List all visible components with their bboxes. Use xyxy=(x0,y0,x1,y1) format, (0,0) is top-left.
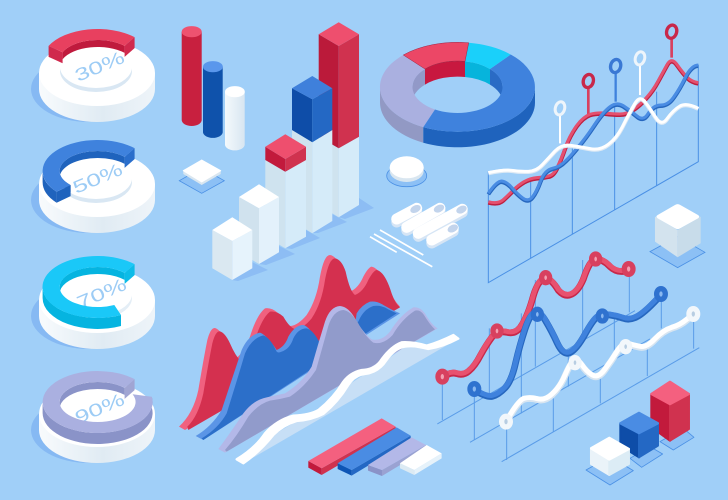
chart: lower three ribbon line charts xyxy=(437,254,699,462)
label: 90%: 90% xyxy=(72,389,128,428)
area: blue xyxy=(196,301,400,440)
icon: text lines xyxy=(370,230,432,267)
blue ribbon line xyxy=(470,289,665,397)
label: 70%: 70% xyxy=(74,274,130,313)
chart: donut xyxy=(380,42,535,147)
red ribbon line xyxy=(438,254,633,382)
column: tallest red xyxy=(319,22,359,217)
white line with pins xyxy=(488,51,698,173)
ring: 50% xyxy=(43,140,135,203)
chart: layered area chart xyxy=(179,255,458,463)
bar: lavender xyxy=(368,437,426,476)
donut segment: cyan xyxy=(465,43,511,69)
icon: round button xyxy=(387,156,427,187)
donut outer side xyxy=(380,87,535,147)
area: red xyxy=(179,255,400,430)
icon: white cube on tile xyxy=(650,204,705,268)
pill 3 xyxy=(418,204,468,236)
axes xyxy=(488,65,698,283)
pill 2 xyxy=(407,203,446,230)
panel: 30% dial xyxy=(31,29,155,122)
cylinder: white xyxy=(225,86,245,150)
icon: small white tile xyxy=(179,160,224,193)
donut segment: red xyxy=(403,42,469,69)
column: short red xyxy=(265,134,306,248)
donut segment: lavender xyxy=(380,55,435,127)
bar: white xyxy=(400,445,442,475)
label: 50%: 50% xyxy=(70,159,126,198)
cube: blue xyxy=(620,413,663,467)
panel: 50% dial xyxy=(31,140,155,233)
area: white ribbon xyxy=(237,335,458,463)
shadows xyxy=(232,198,374,281)
red line with pins xyxy=(488,24,698,204)
chart: three cubes xyxy=(586,382,694,485)
chart: row of flat bars xyxy=(308,418,442,476)
ring: 70% xyxy=(42,256,135,329)
cylinder: red xyxy=(182,26,202,126)
icon: list of pills xyxy=(397,203,468,243)
cylinder: blue xyxy=(203,61,223,138)
column: white medium xyxy=(239,184,279,264)
chart: isometric column chart xyxy=(212,22,374,281)
cube: red xyxy=(651,382,694,450)
blue line with pin xyxy=(488,58,698,201)
bar: red xyxy=(308,418,396,475)
chart: upper multi-line chart xyxy=(488,24,698,283)
column: white short xyxy=(212,217,252,280)
axes xyxy=(437,260,699,462)
column: blue xyxy=(292,76,332,233)
area: lavender xyxy=(218,306,438,453)
donut inner walls xyxy=(412,61,503,103)
donut segment: blue xyxy=(423,54,535,132)
white ribbon line xyxy=(502,309,698,427)
cube: white xyxy=(586,438,633,485)
ring: 90% xyxy=(43,371,153,444)
pill 4 xyxy=(432,223,459,243)
label: 30%: 30% xyxy=(72,47,128,86)
bar: blue xyxy=(338,427,411,476)
pill 1 xyxy=(397,203,422,222)
panel: 70% dial xyxy=(31,256,155,349)
chart: three cylinders xyxy=(182,26,245,150)
panel: 90% dial xyxy=(31,371,155,463)
ring: 30% xyxy=(49,29,135,63)
